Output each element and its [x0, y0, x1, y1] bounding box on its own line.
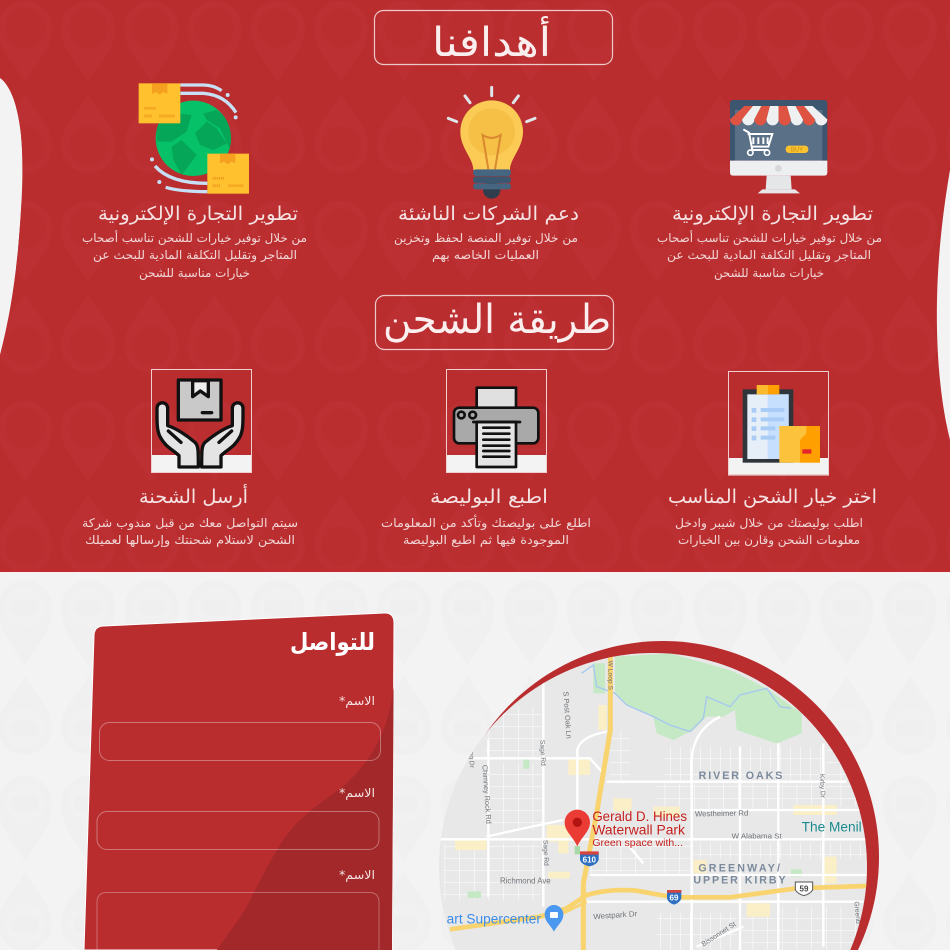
goal card text: e-commerce left: خيارات مناسبة للشحن [139, 266, 250, 281]
goal card text: e-commerce right: من خلال توفير خيارات للشحن تناسب أصحاب [657, 230, 882, 246]
highway shield 610: 610 [583, 855, 597, 864]
step text: send the shipment [82, 484, 298, 548]
highway shield 59 [795, 882, 813, 896]
heading: goals [374, 10, 612, 66]
goal card text: startups: دعم الشركات الناشئة [398, 203, 579, 225]
field 2 label: الاسم* [339, 786, 375, 800]
step text: send the shipment: أرسل الشحنة [139, 484, 248, 508]
place labels: The Menil [802, 819, 862, 834]
road labels: ng Dr [467, 751, 475, 769]
road labels: W Loop S [606, 661, 613, 690]
goal card text: startups [394, 203, 579, 262]
red upper panel [0, 0, 950, 572]
panel: shipping method [82, 296, 877, 548]
goal card text: startups: من خلال توفير المنصة لحفظ وتخزين [394, 231, 578, 246]
field 3 textarea [97, 892, 379, 950]
place labels [447, 809, 862, 926]
step text: print the waybill: الموجودة فيها ثم اطبع البوليصة [403, 533, 569, 548]
icon: hands holding parcel [151, 370, 252, 472]
place labels: Gerald D. Hines [592, 809, 687, 824]
field 1 label: الاسم* [339, 694, 375, 708]
park [615, 653, 802, 743]
step text: choose shipping option: معلومات الشحن وقارن بين الخيارات [678, 533, 860, 548]
map with red crescent [430, 640, 880, 950]
road labels: Westpark Dr [593, 909, 638, 921]
panel: contact form [84, 613, 394, 950]
place labels: Waterwall Park [592, 823, 685, 838]
highways [450, 657, 867, 950]
icon: online store monitor [730, 100, 827, 193]
area labels [693, 770, 786, 887]
red crescent [447, 641, 879, 950]
neighbourhood street grids [443, 707, 867, 950]
road labels: Sage Rd [538, 740, 546, 766]
goal card text: startups: العمليات الخاصه بهم [432, 248, 539, 262]
step text: choose shipping option [668, 486, 877, 548]
step text: send the shipment: الشحن لاستلام شحنتك وإرسالها لعميلك [85, 533, 295, 548]
goal card text: e-commerce right [657, 203, 882, 281]
highway shield 59: 59 [800, 884, 809, 893]
field 1 input [100, 722, 380, 760]
river [582, 665, 791, 732]
highway shield 69 [667, 890, 681, 905]
commercial blocks [455, 705, 837, 917]
goal card text: e-commerce right: خيارات مناسبة للشحن [714, 266, 824, 281]
icon: online store monitor: BUY [791, 148, 803, 154]
main roads [440, 673, 867, 950]
step text: send the shipment: سيتم التواصل معك من قبل مندوب شركة [82, 516, 298, 531]
goal card text: e-commerce right: المتاجر وتقليل التكلفة المادية للبحث عن [667, 248, 871, 263]
icon: globe with parcels [139, 83, 249, 194]
heading: shipping method: طريقة الشحن [383, 297, 611, 343]
road labels: Kirby Dr [818, 774, 826, 799]
place labels: Green space with... [592, 838, 683, 849]
step text: choose shipping option: اطلب بوليصتك من خلال شيبر وادخل [675, 516, 863, 531]
area labels: UPPER KIRBY [693, 875, 786, 887]
step text: print the waybill: اطبع البوليصة [430, 486, 548, 508]
road labels: Richmond Ave [500, 877, 551, 886]
goal card text: e-commerce right: تطوير التجارة الإلكترونية [672, 203, 873, 225]
goal card text: e-commerce left [82, 203, 307, 281]
lower background pin pattern [0, 573, 950, 950]
icon: clipboard and parcel [728, 372, 829, 476]
road labels: Westheimer Rd [695, 809, 748, 818]
road labels: W Alabama St [732, 831, 783, 840]
road labels [467, 661, 861, 948]
heading: goals: أهدافنا [432, 16, 551, 66]
icon: light bulb [448, 87, 535, 199]
road labels: Bissonnet St [701, 921, 737, 948]
road labels: S Post Oak Ln [561, 691, 574, 739]
field 2 input [97, 812, 379, 850]
road labels: Sage Rd [541, 840, 549, 866]
panel: goals [82, 10, 882, 281]
goal card text: e-commerce left: من خلال توفير خيارات للشحن تناسب أصحاب [82, 230, 307, 246]
step text: print the waybill: اطلع على بوليصتك وتأكد من المعلومات [381, 514, 591, 531]
map [430, 640, 880, 950]
store marker [545, 905, 563, 932]
area labels: GREENWAY/ [698, 863, 780, 875]
road labels: Greenb [852, 901, 861, 924]
road labels: Chimney Rock Rd [480, 765, 493, 824]
area labels: RIVER OAKS [699, 770, 782, 782]
form heading: للتواصل [290, 628, 375, 656]
map pin [565, 810, 590, 854]
icon: printer [446, 370, 546, 472]
place labels: art Supercenter [447, 911, 541, 926]
highway shield 610 [580, 851, 599, 866]
goal card text: e-commerce left: تطوير التجارة الإلكترونية [98, 203, 298, 225]
field 3 label: الاسم* [339, 868, 375, 882]
step text: choose shipping option: اختر خيار الشحن المناسب [668, 486, 877, 508]
highway shield 69: 69 [670, 893, 679, 902]
step text: print the waybill [381, 486, 591, 548]
goal card text: e-commerce left: المتاجر وتقليل التكلفة المادية للبحث عن [93, 248, 297, 263]
